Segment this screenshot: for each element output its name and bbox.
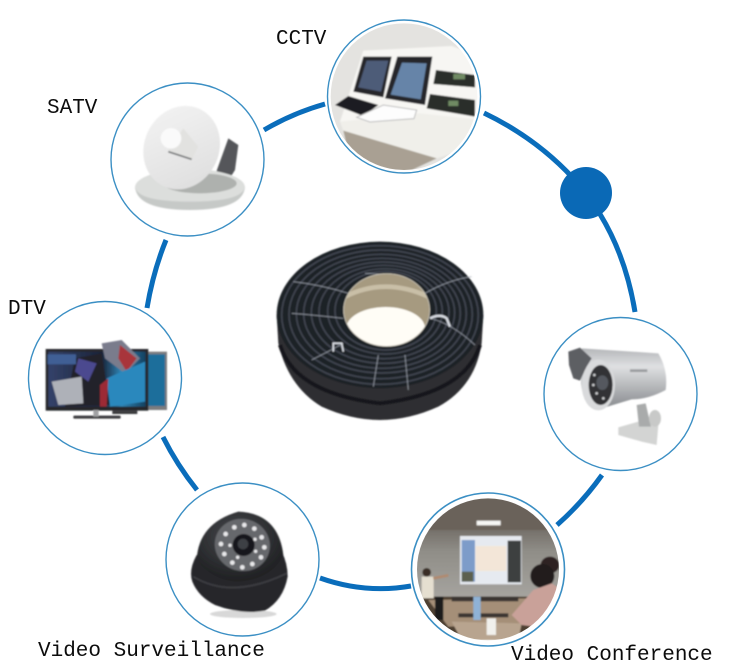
ring: video conference bbox=[412, 493, 564, 646]
photo: conference room bbox=[415, 497, 562, 640]
photo: dome camera bbox=[191, 512, 288, 618]
label: CCTV: CCTV bbox=[276, 28, 327, 51]
ring: connecting blue arcs bbox=[147, 104, 635, 589]
central cable coil bbox=[277, 242, 483, 420]
ring: dome camera bbox=[166, 483, 319, 636]
photo: satellite dish bbox=[134, 106, 246, 211]
panel: SATV bbox=[111, 83, 264, 236]
panel: dome camera bbox=[166, 483, 319, 636]
ring: DTV bbox=[28, 302, 182, 454]
panel: CCTV bbox=[327, 20, 483, 177]
panel: bullet camera bbox=[544, 318, 697, 470]
label: SATV: SATV bbox=[47, 97, 98, 120]
label: Video Surveillance: Video Surveillance bbox=[38, 640, 265, 663]
photo: flat screen TVs bbox=[46, 340, 167, 419]
panel: video conference bbox=[412, 493, 564, 646]
photo: bullet camera bbox=[568, 348, 666, 445]
ring: CCTV bbox=[328, 20, 480, 173]
label: Video Conference: Video Conference bbox=[511, 644, 713, 667]
ring: bullet camera bbox=[544, 318, 697, 470]
panel: DTV bbox=[28, 302, 182, 454]
ring: SATV bbox=[111, 83, 264, 236]
label: DTV: DTV bbox=[8, 298, 46, 321]
blue dot on ring bbox=[560, 167, 612, 219]
photo: CCTV control desk bbox=[330, 24, 477, 170]
